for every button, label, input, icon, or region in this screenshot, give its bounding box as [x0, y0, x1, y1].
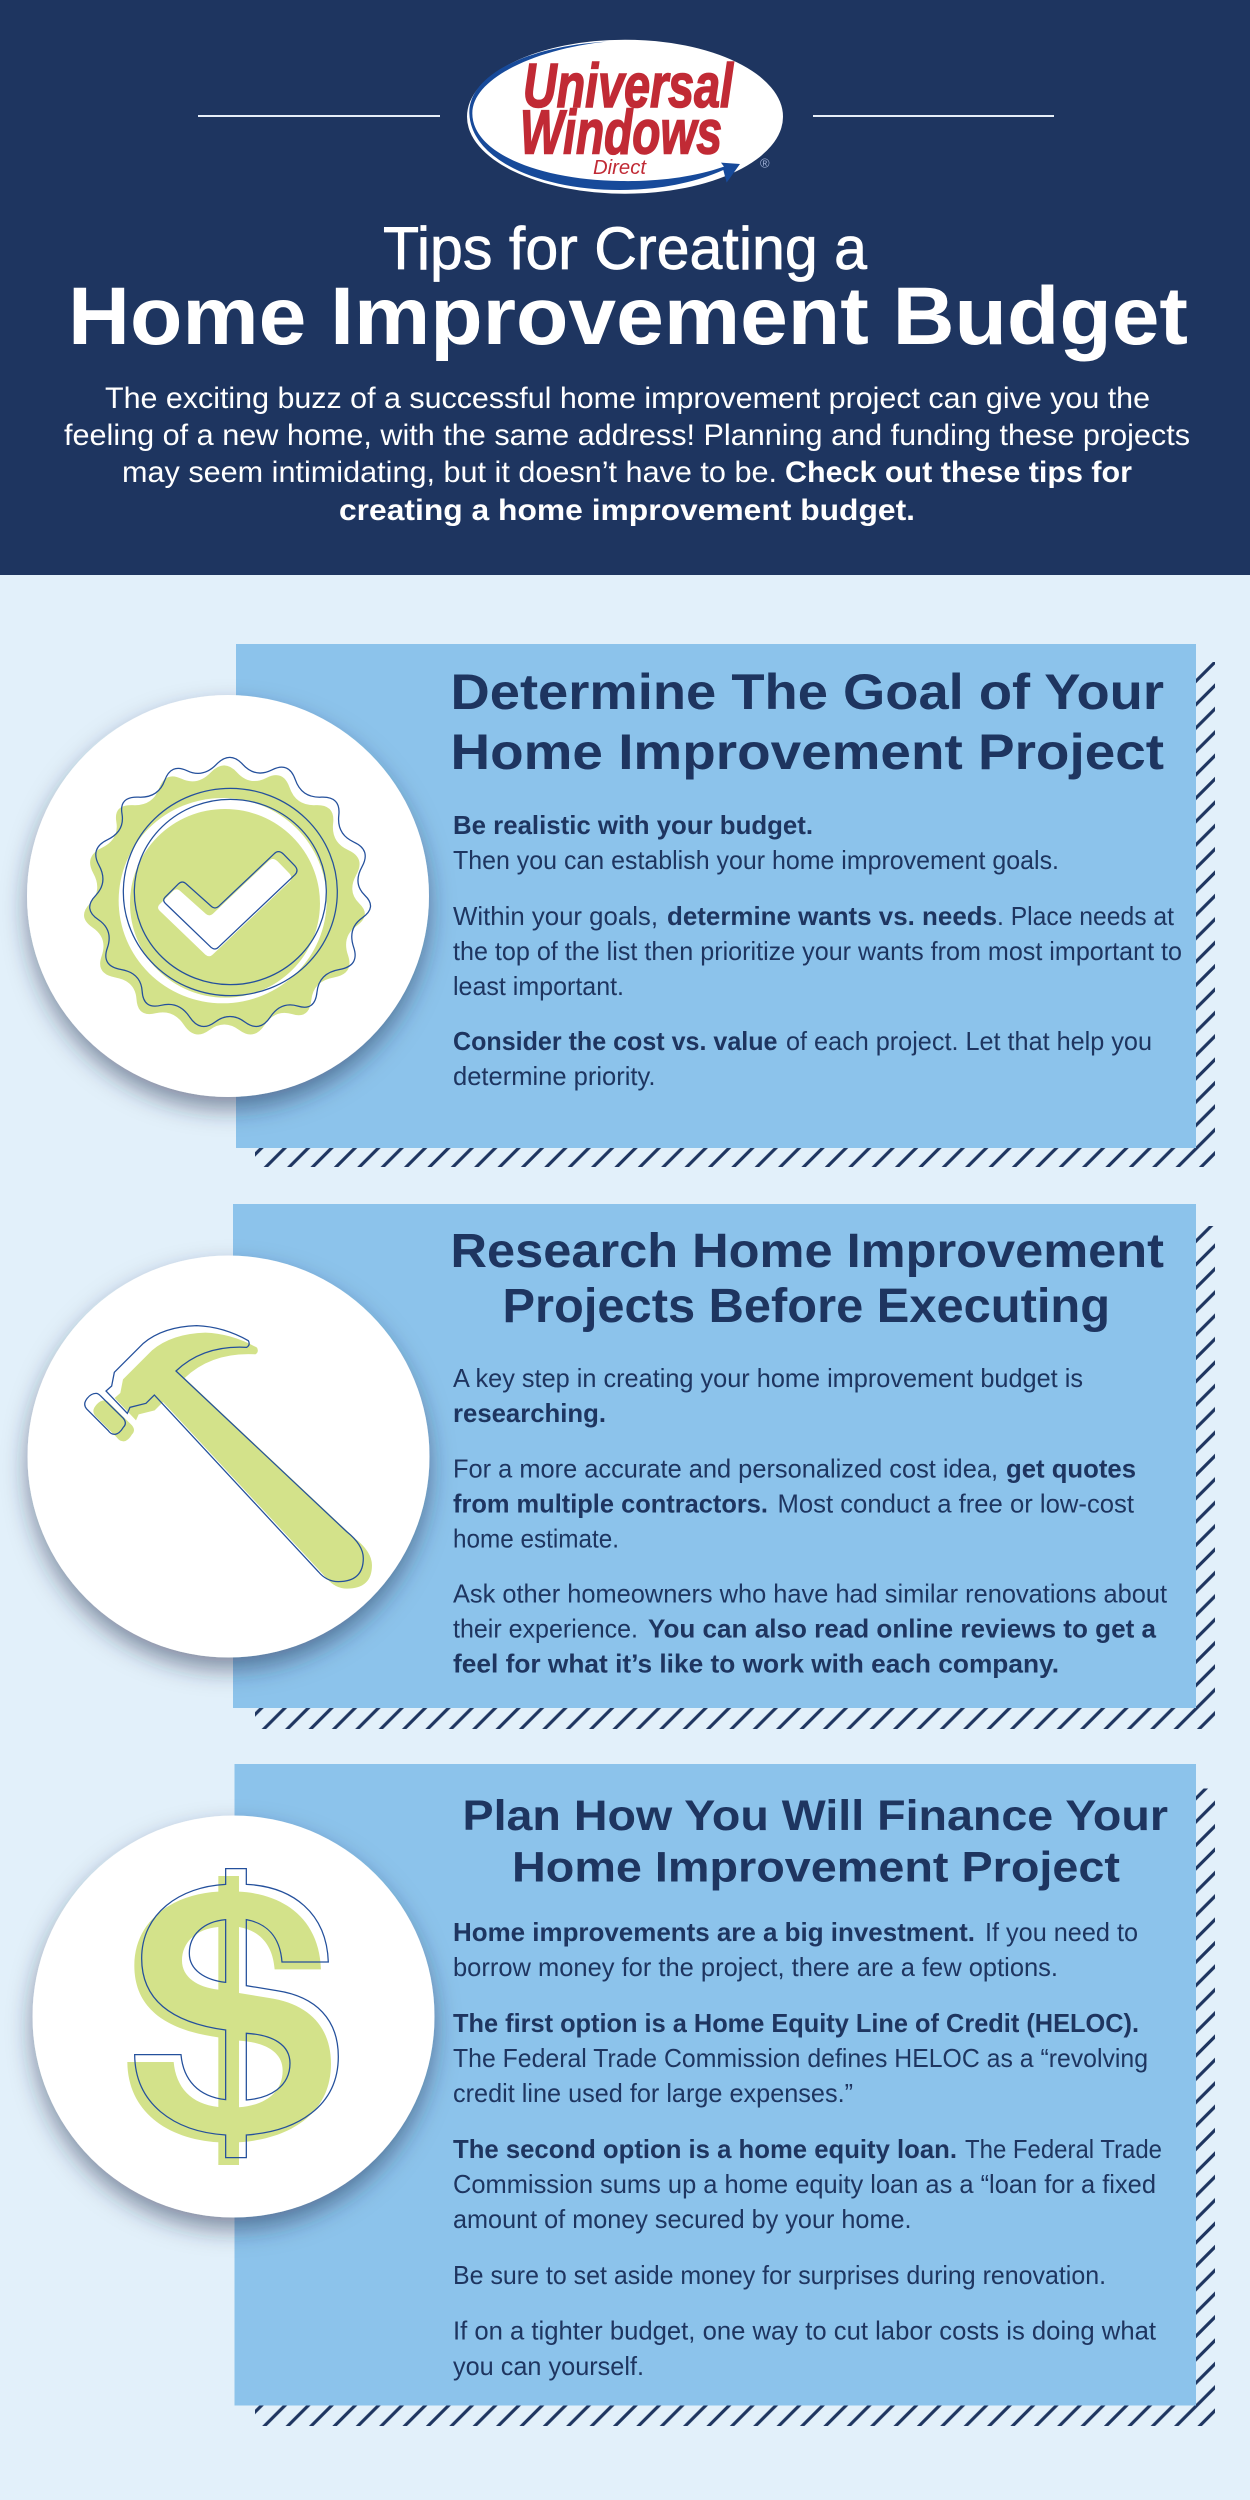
text: tighter budget: you can yourself.	[453, 2351, 644, 2381]
text: wants vs needs: . Place needs at	[997, 901, 1175, 931]
text: home equity loan: The second option is a home equity loan.	[453, 2134, 957, 2164]
text: be realistic: Be realistic with your budget.	[453, 810, 813, 840]
text: reviews: Ask other homeowners who have had similar renovations about	[453, 1578, 1168, 1608]
heading: Projects Before Executing	[502, 1280, 1110, 1333]
text: be realistic: Then you can establish your home improvement goals.	[453, 845, 1059, 875]
text: quotes: from multiple contractors.	[453, 1488, 768, 1518]
text: reviews: their experience.	[453, 1614, 638, 1644]
text: wants vs needs: determine wants vs. needs	[667, 901, 997, 931]
heading	[450, 664, 1164, 780]
icon: hammer	[85, 1326, 372, 1589]
icon: badge with check mark	[84, 757, 371, 1034]
text: key step	[453, 1363, 1083, 1428]
text: reviews: feel for what it’s like to work with each company.	[453, 1648, 1059, 1678]
text: big investment: borrow money for the project, there are a few options.	[453, 1952, 1058, 1982]
panel: determine the goal	[27, 644, 1215, 1167]
text: reviews	[453, 1578, 1168, 1678]
text: quotes	[453, 1454, 1136, 1554]
panel: research projects	[28, 1204, 1215, 1729]
text: home equity loan: Commission sums up a home equity loan as a “loan for a fixed	[453, 2169, 1156, 2199]
text: home equity loan: The Federal Trade	[965, 2134, 1162, 2164]
text: quotes: Most conduct a free or low-cost	[778, 1488, 1135, 1518]
header panel	[0, 0, 1250, 575]
text: key step: A key step in creating your home improvement budget is	[453, 1363, 1083, 1393]
title	[68, 215, 1188, 362]
text: quotes: get quotes	[1006, 1454, 1136, 1484]
heading: Home Improvement Project	[450, 724, 1164, 780]
text: wants vs needs: the top of the list then prioritize your wants from most important to	[453, 936, 1182, 966]
intro text: creating a home improvement budget.	[339, 494, 915, 527]
heading	[462, 1792, 1168, 1892]
text: quotes: home estimate.	[453, 1524, 619, 1554]
text: be realistic	[453, 810, 1059, 875]
text: HELOC: The Federal Trade Commission defines HELOC as a “revolving	[453, 2043, 1148, 2073]
text: cost vs value	[453, 1026, 1152, 1091]
title: Home Improvement Budget	[68, 271, 1188, 362]
text: cost vs value: determine priority.	[453, 1061, 656, 1091]
icon: dollar sign	[127, 1869, 338, 2165]
panel: plan financing	[32, 1764, 1215, 2426]
text: reviews: You can also read online reviews to get a	[648, 1614, 1157, 1644]
text: wants vs needs: least important.	[453, 971, 624, 1001]
text: tighter budget: If on a tighter budget, one way to cut labor costs is doing what	[453, 2316, 1157, 2346]
text: surprises: Be sure to set aside money for surprises during renovation.	[453, 2260, 1106, 2290]
text: big investment	[453, 1917, 1138, 1982]
heading: Research Home Improvement	[450, 1225, 1164, 1278]
intro text: may seem intimidating, but it doesn’t have to be.	[122, 456, 777, 489]
text: big investment: Home improvements are a big investment.	[453, 1917, 975, 1947]
logo: Universal Windows Direct: Universal	[523, 52, 734, 121]
text: home equity loan: amount of money secured by your home.	[453, 2204, 912, 2234]
heading: Plan How You Will Finance Your	[462, 1792, 1168, 1840]
intro text	[64, 382, 1190, 527]
text: HELOC: credit line used for large expenses.”	[453, 2078, 853, 2108]
logo: Universal Windows Direct: Windows	[520, 98, 722, 167]
text: big investment: If you need to	[985, 1917, 1138, 1947]
text: key step: researching.	[453, 1398, 606, 1428]
heading: Determine The Goal of Your	[450, 664, 1164, 720]
intro text: The exciting buzz of a successful home improvement project can give you the	[105, 382, 1150, 415]
intro text: feeling of a new home, with the same address! Planning and funding these projects	[64, 419, 1190, 452]
text: cost vs value: Consider the cost vs. value	[453, 1026, 778, 1056]
text: cost vs value: of each project. Let that help you	[786, 1026, 1152, 1056]
logo: Universal Windows Direct	[467, 40, 783, 194]
heading: Home Improvement Project	[512, 1844, 1120, 1892]
intro text: Check out these tips for	[785, 456, 1132, 489]
text: home equity loan	[453, 2134, 1162, 2234]
text: quotes: For a more accurate and personalized cost idea,	[453, 1454, 998, 1484]
text: tighter budget	[453, 2316, 1157, 2381]
text: wants vs needs	[453, 901, 1182, 1001]
text: HELOC: The first option is a Home Equity Line of Credit (HELOC).	[453, 2008, 1139, 2038]
logo: Universal Windows Direct: ®	[760, 156, 770, 170]
text: wants vs needs: Within your goals,	[453, 901, 658, 931]
logo: Universal Windows Direct: Direct	[593, 157, 647, 179]
heading	[450, 1225, 1164, 1333]
text: HELOC	[453, 2008, 1148, 2108]
title: Tips for Creating a	[383, 215, 868, 282]
